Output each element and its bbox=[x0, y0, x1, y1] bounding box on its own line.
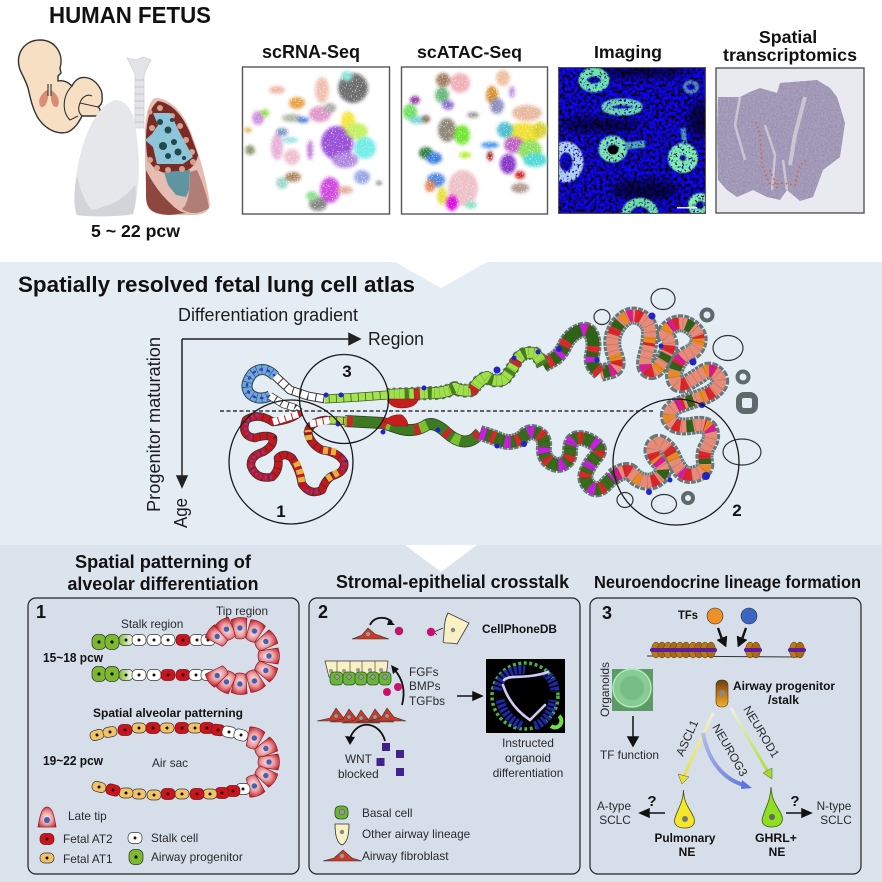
cells: upper row 15-18 pcw bbox=[92, 616, 280, 695]
labels: region numbers: 3 bbox=[342, 362, 352, 381]
label: signals: FGFs bbox=[409, 665, 439, 679]
legend: stalk cell: Stalk cell bbox=[151, 831, 198, 845]
chromatin strand with nucleosomes bbox=[647, 642, 806, 658]
label: progenitor maturation: Progenitor maturation bbox=[144, 337, 164, 512]
icon: bronchial tree bbox=[145, 113, 193, 164]
panel: scRNA-Seq: scRNA-Seq bbox=[262, 42, 360, 62]
label: pulmonary NE bbox=[654, 831, 716, 859]
panel 2: stromal crosstalk bbox=[309, 598, 580, 874]
label: A-type SCLC: A-type bbox=[597, 799, 631, 813]
icon: teal cavity bbox=[164, 170, 190, 197]
panel 1: alveolar patterning bbox=[28, 598, 299, 874]
label: signals bbox=[409, 665, 445, 708]
label: TF function: TF function bbox=[600, 748, 659, 762]
label: GHRL NE: NE bbox=[769, 845, 785, 859]
label: instructed organoid differentiation: organoid bbox=[505, 751, 551, 765]
panel: imaging bbox=[558, 45, 706, 214]
legend bbox=[323, 806, 471, 863]
legend: fetal AT2 bbox=[40, 832, 113, 846]
label: CellPhoneDB: CellPhoneDB bbox=[482, 622, 557, 636]
icon: trachea bbox=[127, 57, 151, 128]
label: WNT blocked bbox=[338, 752, 379, 781]
icon: grey lung bbox=[74, 100, 139, 216]
image: organoid brightfield bbox=[612, 669, 653, 711]
legend: fetal AT1: Fetal AT1 bbox=[63, 852, 113, 866]
label: N-type SCLC bbox=[817, 799, 852, 827]
label: stalk region: Stalk region bbox=[121, 617, 183, 631]
section: atlas background bbox=[0, 262, 882, 545]
cells: lower sac 19-22 pcw bbox=[89, 722, 280, 800]
legend bbox=[38, 807, 243, 866]
label: region: Region bbox=[368, 329, 424, 349]
icon: dissected lung bbox=[145, 98, 210, 215]
label: instructed organoid differentiation bbox=[493, 736, 563, 780]
label: instructed organoid differentiation: differentiation bbox=[493, 766, 563, 780]
tube: upper branch mature bbox=[325, 330, 600, 399]
arrow: to A-type SCLC bbox=[640, 809, 665, 817]
section: detail panels background bbox=[0, 545, 882, 882]
tube: upper branch tip and stalk bbox=[247, 369, 325, 412]
heading: stromal: Stromal-epithelial crosstalk bbox=[336, 572, 570, 592]
panel: imaging: Imaging bbox=[594, 42, 662, 62]
image: confocal micrograph bbox=[554, 66, 716, 214]
legend: other airway lineage: Other airway lineage bbox=[362, 827, 471, 841]
rings: airway cross sections bbox=[683, 310, 755, 503]
labels: region numbers: 2 bbox=[732, 501, 742, 520]
label: airway progenitor stalk bbox=[733, 679, 835, 707]
arrow: WNT curve bbox=[345, 725, 385, 745]
label: pulmonary NE: NE bbox=[679, 845, 695, 859]
arrow: fibroblast to epithelium bbox=[391, 665, 404, 705]
icon: epithelium layers bbox=[325, 661, 391, 685]
label: ASCL1: ASCL1 bbox=[673, 718, 701, 758]
arrow: to N-type SCLC bbox=[786, 809, 811, 817]
icon: fetus bbox=[18, 40, 102, 133]
outlines: alveolar sacs bbox=[594, 288, 761, 514]
WNT squares bbox=[376, 743, 404, 776]
heading: alveolar: Spatial patterning of bbox=[75, 552, 252, 572]
legend: basal cell bbox=[335, 806, 412, 820]
labels: region numbers: 1 bbox=[276, 502, 286, 521]
cells: red clusters bbox=[384, 399, 418, 426]
tube: lower alveolar loop bbox=[244, 412, 345, 492]
tube: lower branch mature bbox=[345, 316, 720, 489]
panel 3: neuroendocrine lineage: 3 bbox=[602, 603, 612, 623]
arrow: to organoid bbox=[457, 692, 482, 700]
background: top white band bbox=[0, 0, 882, 262]
alveolar balls bbox=[147, 105, 196, 173]
label: question mark left: ? bbox=[647, 793, 657, 810]
chart: epithelial tube atlas bbox=[220, 288, 761, 525]
label: GHRL NE bbox=[755, 831, 797, 859]
icon: GHRL NE cell bbox=[762, 787, 782, 827]
panel: scATAC-Seq bbox=[402, 42, 548, 214]
label: N-type SCLC: SCLC bbox=[820, 813, 852, 827]
image: organoid bbox=[486, 659, 565, 733]
panel: spatial transcriptomics: Spatial bbox=[759, 27, 817, 47]
chart: scATAC UMAP bbox=[403, 70, 547, 211]
legend: fetal AT2: Fetal AT2 bbox=[63, 832, 113, 846]
label: tip region: Tip region bbox=[216, 604, 268, 618]
panel: spatial transcriptomics: transcriptomics bbox=[723, 45, 857, 65]
legend: airway progenitor: Airway progenitor bbox=[151, 850, 243, 864]
label: WNT blocked: blocked bbox=[338, 767, 379, 781]
label: organoids: Organoids bbox=[598, 662, 612, 717]
arrow: region axis bbox=[182, 334, 360, 344]
icon: TF circles bbox=[707, 608, 757, 624]
label: question mark right: ? bbox=[790, 793, 800, 810]
label: signals: BMPs bbox=[409, 679, 441, 693]
label: differentiation gradient: Differentiation gradient bbox=[178, 305, 358, 325]
signal dots bbox=[383, 683, 402, 696]
label: N-type SCLC: N-type bbox=[817, 799, 852, 813]
label: A-type SCLC: SCLC bbox=[599, 813, 631, 827]
panel: spatial transcriptomics bbox=[716, 27, 864, 213]
panel: scRNA-Seq bbox=[242, 42, 390, 214]
label: NEUROD1: NEUROD1 bbox=[740, 703, 782, 760]
arrow: ASCL1 path bbox=[678, 713, 713, 784]
labels: region numbers bbox=[276, 362, 742, 521]
label: 15~18 pcw: 15~18 pcw bbox=[43, 650, 104, 665]
legend: stalk cell bbox=[128, 831, 198, 845]
arrow: NEUROD1 path bbox=[731, 708, 772, 779]
icon: airway progenitor cell bbox=[716, 680, 728, 707]
legend: airway fibroblast bbox=[323, 849, 449, 863]
panel 3: neuroendocrine lineage bbox=[590, 598, 861, 874]
label: airway progenitor stalk: /stalk bbox=[768, 693, 799, 707]
label: instructed organoid differentiation: Instructed bbox=[502, 736, 554, 750]
icon: pulmonary NE cell bbox=[675, 790, 694, 828]
heading: neuroendocrine: Neuroendocrine lineage formation bbox=[594, 572, 861, 592]
panel 1: alveolar patterning: 1 bbox=[36, 602, 46, 622]
icon: fetal lungs bbox=[39, 90, 59, 107]
heading: atlas: Spatially resolved fetal lung cell atlas bbox=[18, 272, 415, 297]
label: signals: TGFbs bbox=[409, 694, 445, 708]
icon: ligand receptor cell bbox=[427, 613, 469, 644]
legend: other airway lineage bbox=[335, 824, 471, 845]
label: WNT blocked: WNT bbox=[345, 752, 372, 766]
label: GHRL NE: GHRL+ bbox=[755, 831, 797, 845]
panel 2: stromal crosstalk: 2 bbox=[318, 602, 328, 622]
label: spatial alveolar patterning: Spatial alveolar patterning bbox=[93, 706, 243, 720]
arrows: TFs to chromatin bbox=[717, 628, 747, 647]
dashed divider bbox=[220, 410, 655, 412]
chart: scRNA UMAP bbox=[244, 71, 382, 211]
legend: airway fibroblast: Airway fibroblast bbox=[362, 849, 449, 863]
panel: scATAC-Seq: scATAC-Seq bbox=[417, 42, 522, 62]
arrow: age axis bbox=[177, 339, 187, 487]
label: A-type SCLC bbox=[597, 799, 631, 827]
icon: secreting fibroblast bbox=[352, 618, 403, 639]
region circles bbox=[229, 354, 739, 525]
heading: alveolar bbox=[68, 552, 258, 594]
label: air sac: Air sac bbox=[152, 756, 188, 770]
label: airway progenitor stalk: Airway progenitor bbox=[733, 679, 835, 693]
legend: late tip bbox=[38, 807, 107, 827]
legend: late tip: Late tip bbox=[68, 809, 107, 823]
icon: fibroblast layer bbox=[317, 708, 406, 723]
arrow: NEUROG3 path bbox=[703, 733, 752, 789]
label: pulmonary NE: Pulmonary bbox=[654, 831, 716, 845]
legend: fetal AT1 bbox=[40, 852, 113, 866]
cells: migrating neuroendocrine bbox=[324, 312, 710, 495]
label: age: Age bbox=[171, 498, 191, 528]
arrow: organoid to TF function bbox=[628, 716, 638, 746]
label: NEUROG3: NEUROG3 bbox=[709, 722, 751, 779]
legend: basal cell: Basal cell bbox=[362, 806, 412, 820]
label: TFs: TFs bbox=[678, 608, 698, 622]
title: human fetus: HUMAN FETUS bbox=[49, 2, 211, 28]
label: age range: 5 ~ 22 pcw bbox=[91, 221, 180, 241]
heading: alveolar: alveolar differentiation bbox=[68, 574, 258, 594]
label: 19~22 pcw: 19~22 pcw bbox=[43, 753, 104, 768]
image: tissue section bbox=[717, 80, 845, 201]
